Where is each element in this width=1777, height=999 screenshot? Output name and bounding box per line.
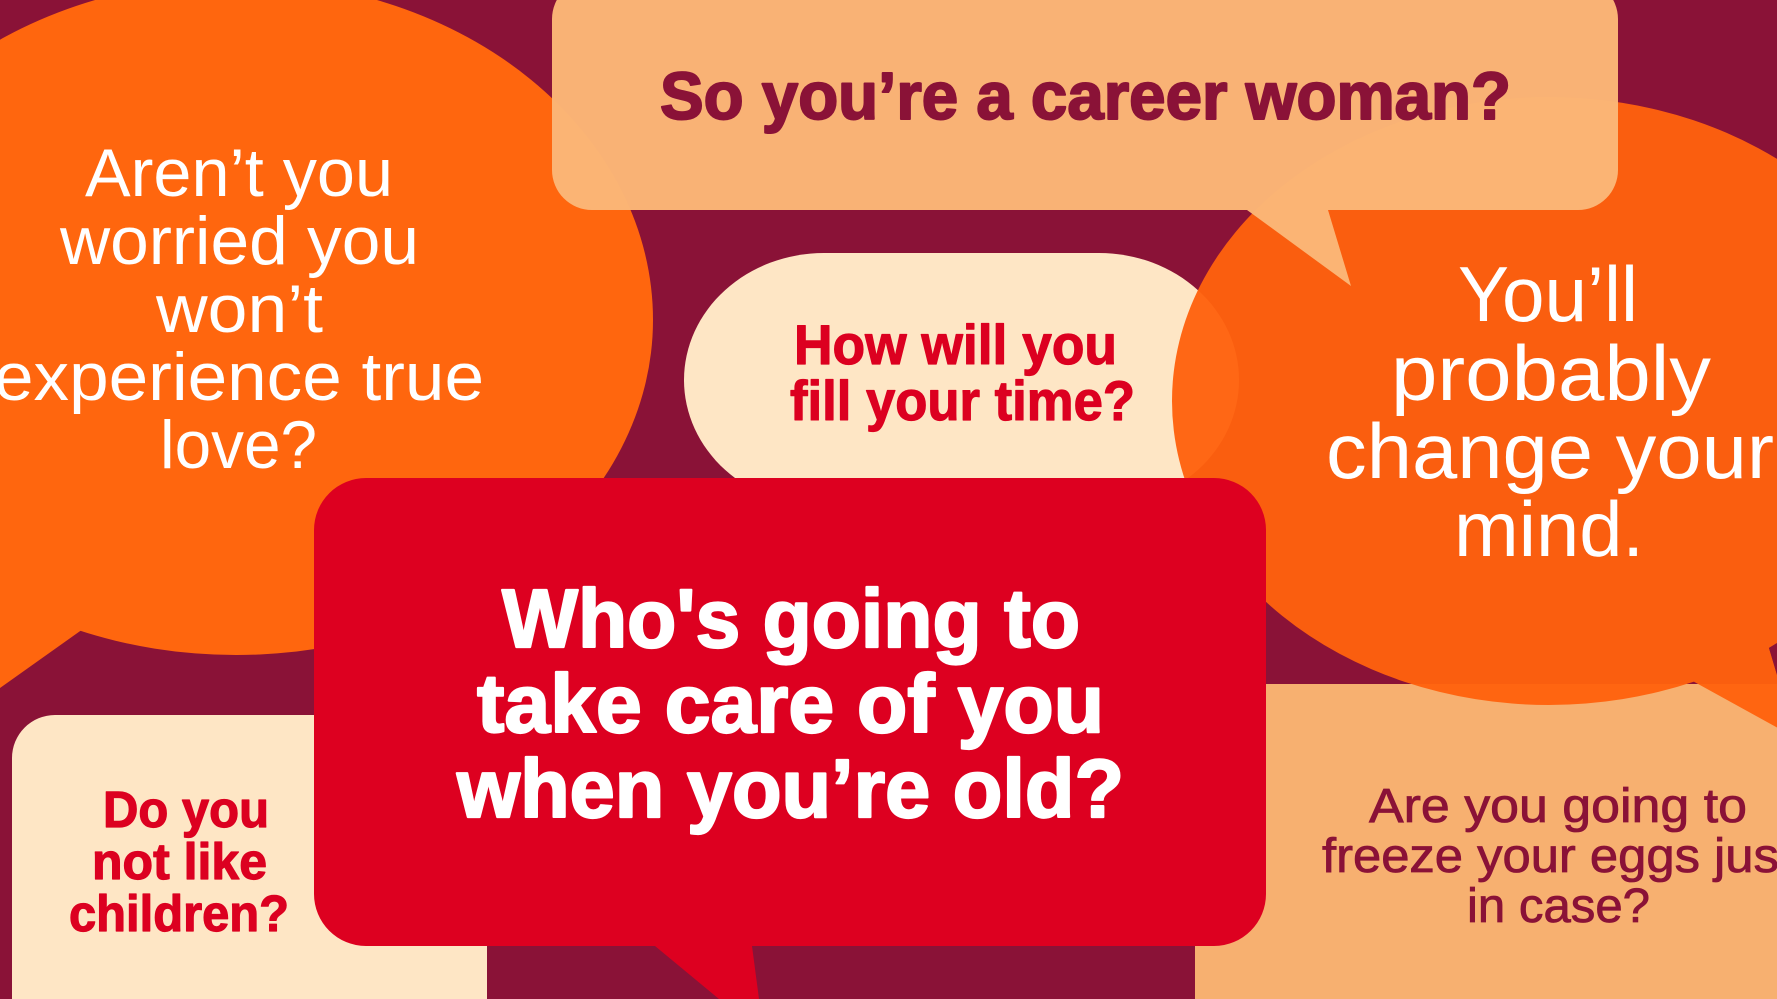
panel: cream lower-left bubble bbox=[12, 715, 487, 999]
text: do you not like children: not like bbox=[92, 833, 267, 890]
text: who's going to take care of you when you're old bbox=[456, 572, 1124, 835]
panel: peach top bubble bbox=[552, 0, 1618, 286]
text: how will you fill your time: fill your time? bbox=[790, 369, 1135, 432]
panel: peach lower-right bubble bbox=[1195, 684, 1777, 999]
text: who's going to take care of you when you're old: when you’re old? bbox=[456, 742, 1124, 835]
text: do you not like children: children? bbox=[69, 885, 289, 942]
text: you'll probably change your mind: change your bbox=[1326, 407, 1774, 495]
text: you'll probably change your mind bbox=[1326, 250, 1774, 573]
text: do you not like children bbox=[69, 781, 289, 942]
panel: orange left bubble bbox=[0, 0, 653, 688]
text: aren't you worried: Aren’t you bbox=[85, 135, 393, 211]
panel: red central bubble bbox=[314, 478, 1266, 999]
text: are you going to freeze your eggs: freeze your eggs just bbox=[1322, 830, 1777, 883]
text: who's going to take care of you when you're old: Who's going to bbox=[502, 572, 1080, 665]
text: do you not like children: Do you bbox=[103, 781, 269, 838]
text: are you going to freeze your eggs bbox=[1322, 780, 1777, 933]
text: you'll probably change your mind: You’ll bbox=[1458, 250, 1638, 338]
text: aren't you worried: love? bbox=[160, 407, 317, 483]
panel: orange right bubble bbox=[1172, 97, 1777, 738]
text: so you're a career woman: So you’re a career woman? bbox=[660, 59, 1511, 134]
panel: cream pill bubble bbox=[684, 253, 1239, 507]
text: aren't you worried: worried you bbox=[59, 203, 419, 279]
lower-left bubble corner bbox=[12, 715, 55, 758]
text: how will you fill your time bbox=[790, 313, 1135, 432]
tail notch bbox=[1769, 643, 1777, 675]
text: aren't you worried: won’t bbox=[155, 271, 323, 347]
text: you'll probably change your mind: probably bbox=[1391, 329, 1711, 417]
text: are you going to freeze your eggs: in case? bbox=[1467, 880, 1650, 933]
text: aren't you worried: experience true bbox=[0, 339, 484, 415]
text: aren't you worried bbox=[0, 135, 484, 483]
text: who's going to take care of you when you're old: take care of you bbox=[477, 657, 1104, 750]
text: are you going to freeze your eggs: Are you going to bbox=[1369, 780, 1747, 833]
text: you'll probably change your mind: mind. bbox=[1454, 485, 1644, 573]
text: how will you fill your time: How will you bbox=[794, 313, 1117, 376]
